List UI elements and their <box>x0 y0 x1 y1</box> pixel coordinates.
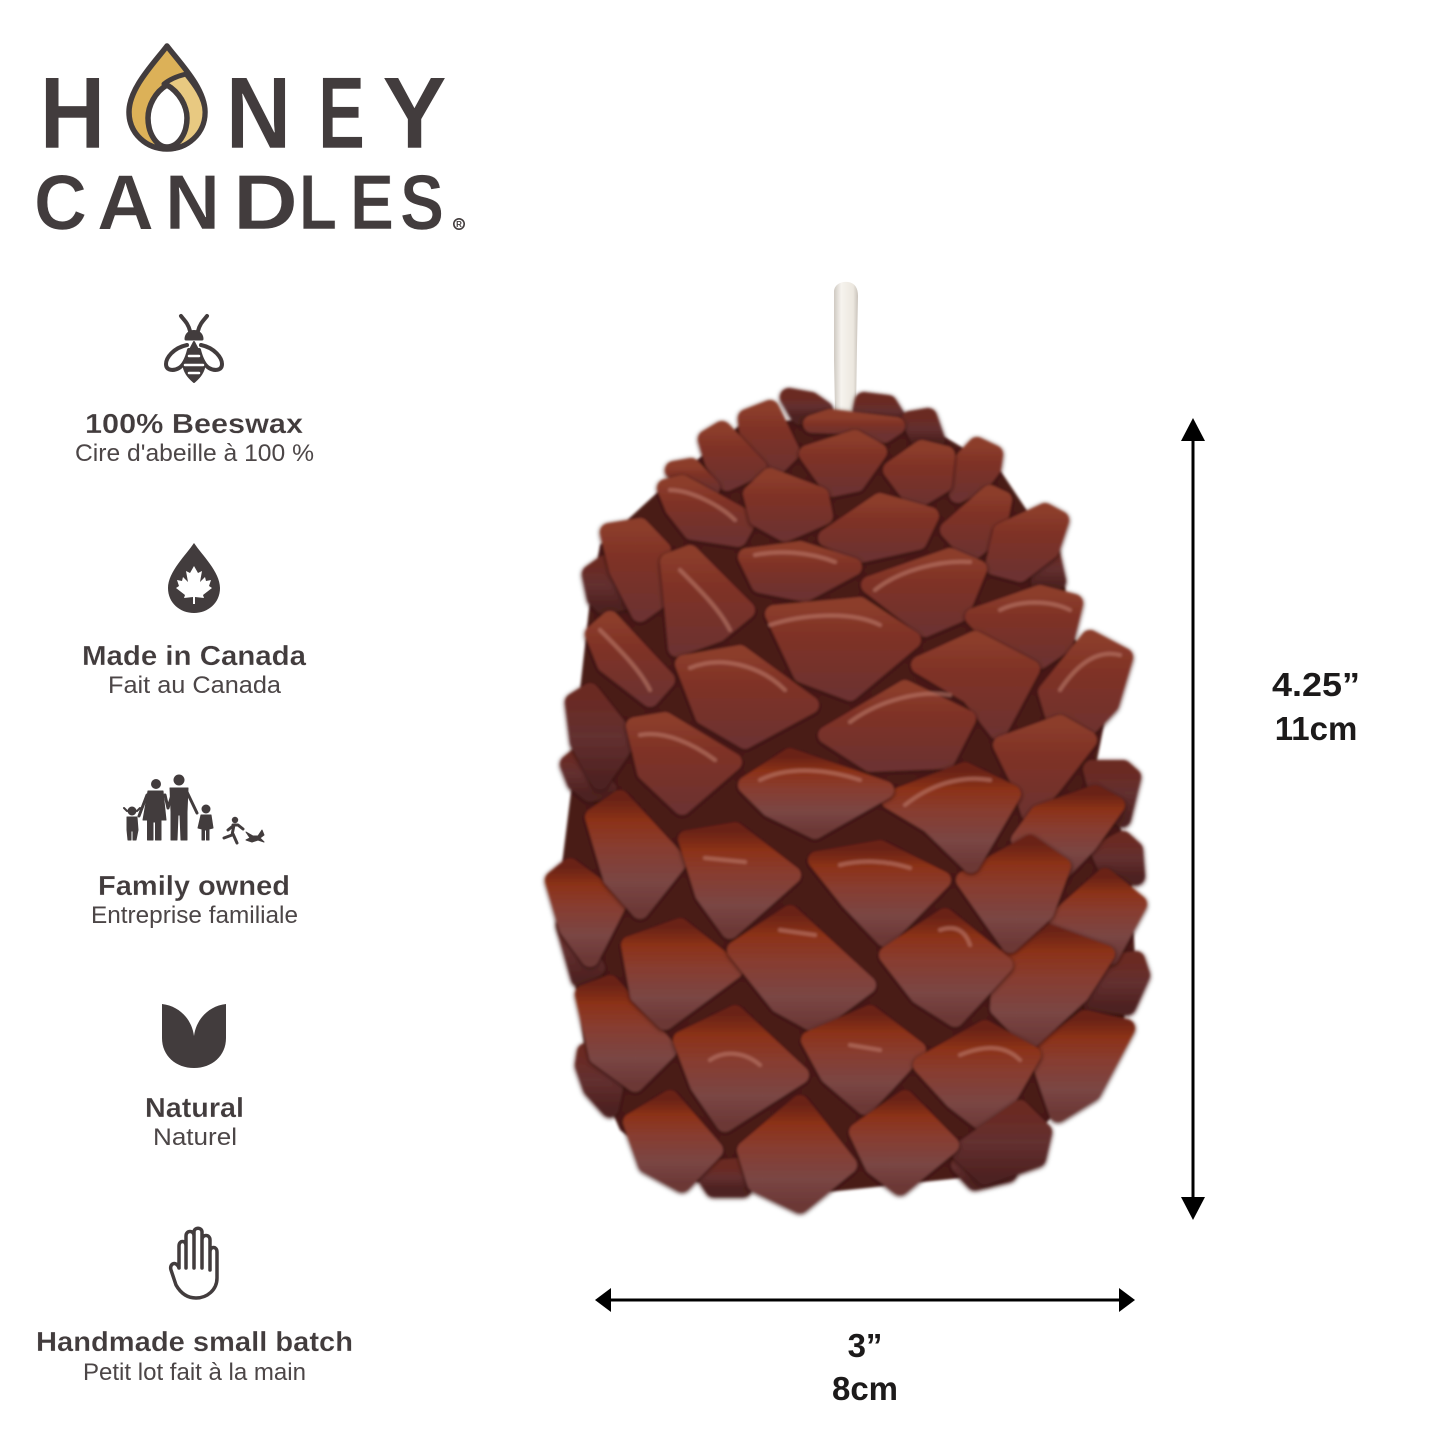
logo word: HONEY: E <box>318 56 365 170</box>
logo word: HONEY <box>40 56 447 170</box>
label: height: 11cm <box>1275 710 1357 747</box>
logo word: HONEY: H <box>40 56 106 170</box>
label: height <box>1272 666 1360 747</box>
side scales <box>565 397 1141 1188</box>
lower scales <box>554 757 1138 1204</box>
heading: Family owned <box>98 870 290 901</box>
label: width <box>832 1327 898 1407</box>
label: width: 8cm <box>832 1370 898 1407</box>
logo word: CANDLES: N <box>165 158 220 246</box>
logo word: CANDLES: S <box>400 158 444 246</box>
French text: Naturel <box>153 1124 237 1151</box>
arrow: width dimension <box>595 1288 1135 1312</box>
logo word: CANDLES: C <box>34 158 87 246</box>
logo word: CANDLES: E <box>350 158 394 246</box>
logo word: CANDLES: L <box>299 158 337 246</box>
French text: Petit lot fait à la main <box>83 1359 306 1386</box>
logo icon: honey flame drop <box>129 46 205 149</box>
icon: family with dog <box>124 774 264 843</box>
arrow: height dimension <box>1181 418 1205 1220</box>
upper scales <box>594 409 1124 813</box>
French text: Entreprise familiale <box>91 902 298 929</box>
French text: Cire d'abeille à 100 % <box>75 440 314 467</box>
wax highlights <box>600 490 1120 1065</box>
heading: Handmade small batch <box>36 1326 353 1357</box>
heading: Natural <box>145 1092 244 1123</box>
icon: drop with maple leaf <box>168 543 220 613</box>
French text: Fait au Canada <box>108 672 282 699</box>
heading: 100% Beeswax <box>85 408 303 439</box>
label: height: 4.25” <box>1272 666 1360 703</box>
logo: Honey Candles <box>34 46 464 246</box>
registered mark <box>454 219 464 229</box>
feature: Made in Canada <box>82 543 306 699</box>
pine cone candle <box>554 282 1141 1204</box>
icon: open hand <box>171 1228 217 1298</box>
logo word: CANDLES: A <box>97 158 154 246</box>
feature: 100% Beeswax <box>75 316 314 467</box>
feature: Natural <box>145 1004 244 1151</box>
logo word: HONEY: N <box>226 56 292 170</box>
label: width: 3” <box>848 1327 882 1364</box>
logo word: HONEY: Y <box>382 56 447 170</box>
heading: Made in Canada <box>82 640 306 671</box>
feature: Handmade small batch <box>36 1228 353 1386</box>
icon: bee <box>166 316 222 382</box>
logo word: CANDLES <box>34 158 444 246</box>
feature: Family owned <box>91 774 298 929</box>
logo word: CANDLES: D <box>233 158 298 246</box>
wick <box>834 282 858 412</box>
registered mark: R <box>456 220 462 229</box>
cone body and scales <box>554 397 1141 1204</box>
icon: tulip leaves <box>162 1004 226 1068</box>
cone core <box>560 410 1135 1195</box>
